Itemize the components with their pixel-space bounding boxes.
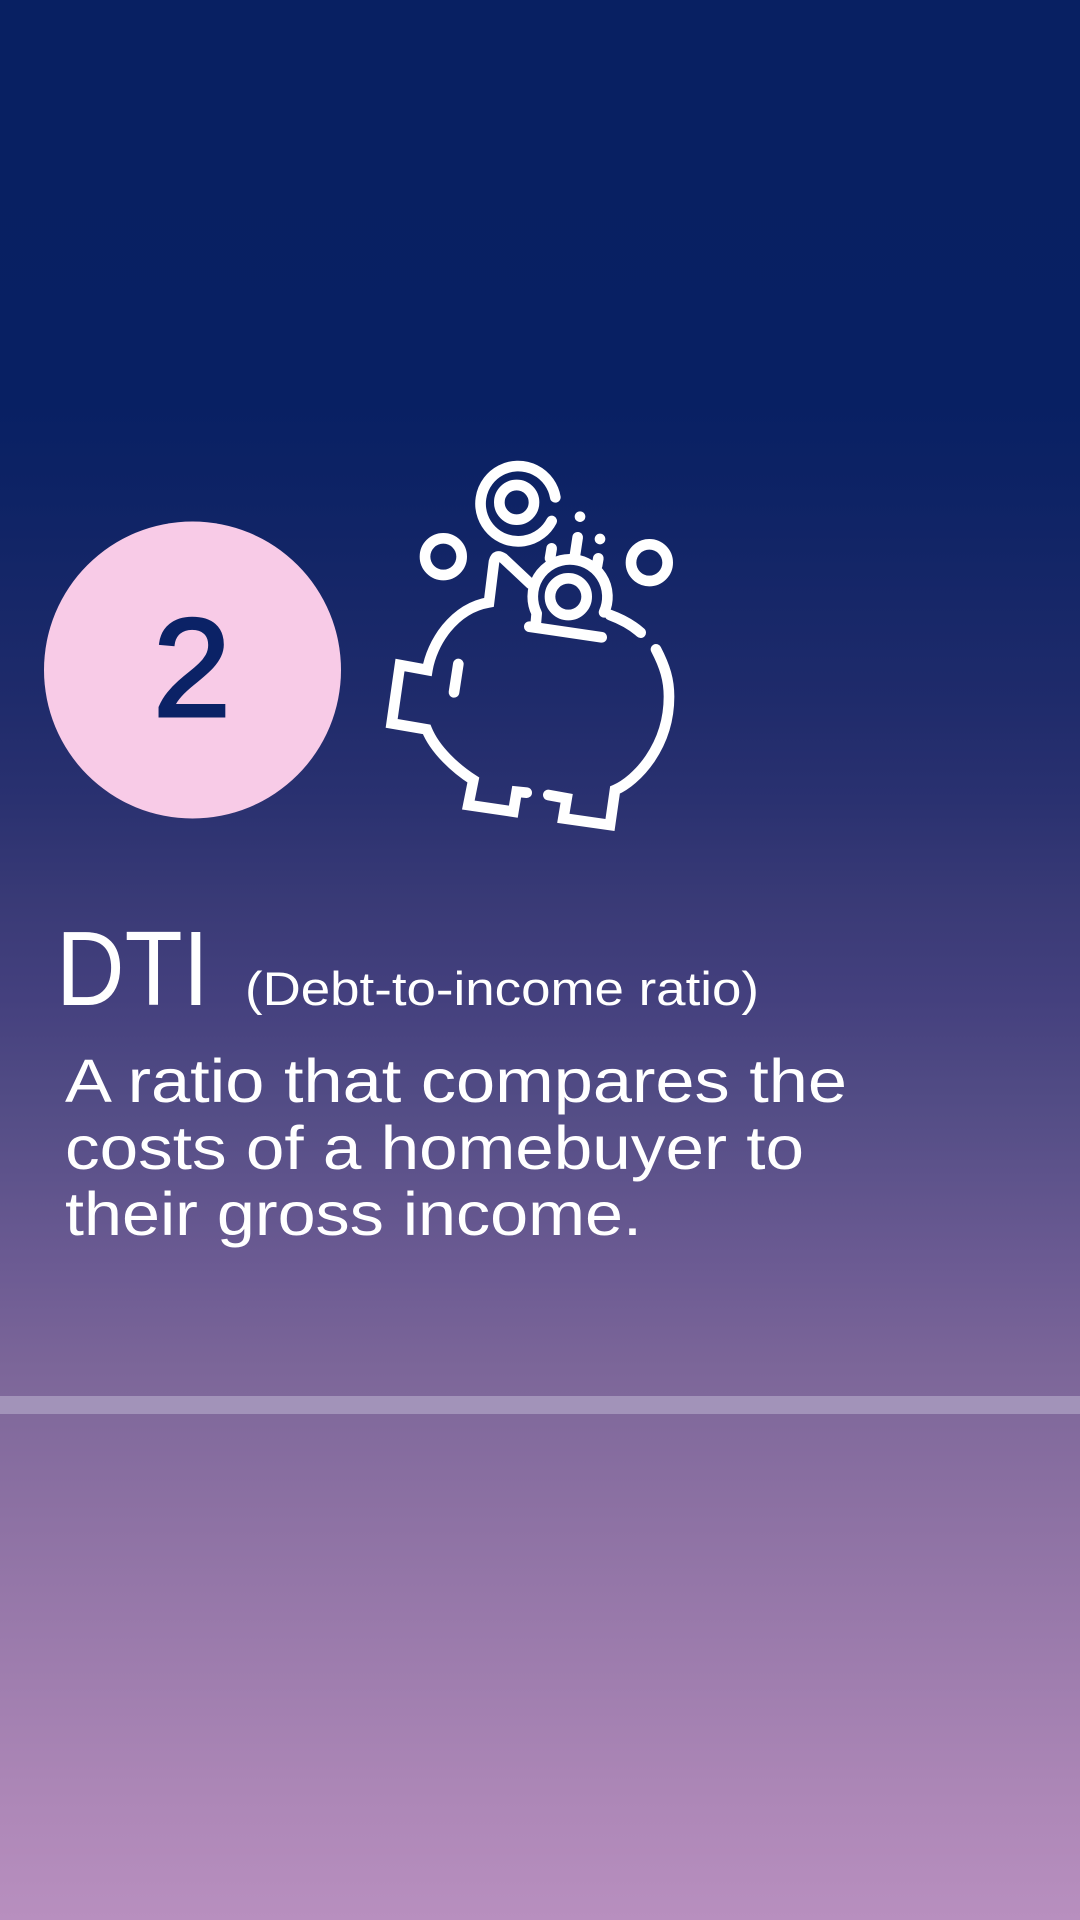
definition line 2: costs of a homebuyer to	[65, 1114, 804, 1182]
icon: right small coin	[631, 544, 668, 581]
icon: large falling coin	[481, 466, 555, 541]
heading: DTI: DTI	[56, 910, 209, 1028]
icon: sparkle dots and ticks	[550, 511, 605, 566]
icon: piggy bank with coins	[392, 466, 669, 825]
definition line 3: their gross income.	[65, 1180, 642, 1248]
subheading: full term: (Debt-to-income ratio)	[245, 962, 759, 1015]
icon: pig body outline	[392, 556, 669, 825]
divider band	[0, 1396, 1080, 1414]
icon: coin entering slot	[529, 559, 607, 637]
definition text	[65, 1047, 847, 1248]
number badge	[44, 522, 341, 818]
badge number: 2	[153, 589, 231, 746]
definition line 1: A ratio that compares the	[65, 1047, 847, 1115]
icon: pig eye	[454, 664, 458, 692]
badge circle	[44, 522, 341, 818]
icon: left small coin	[425, 538, 462, 575]
